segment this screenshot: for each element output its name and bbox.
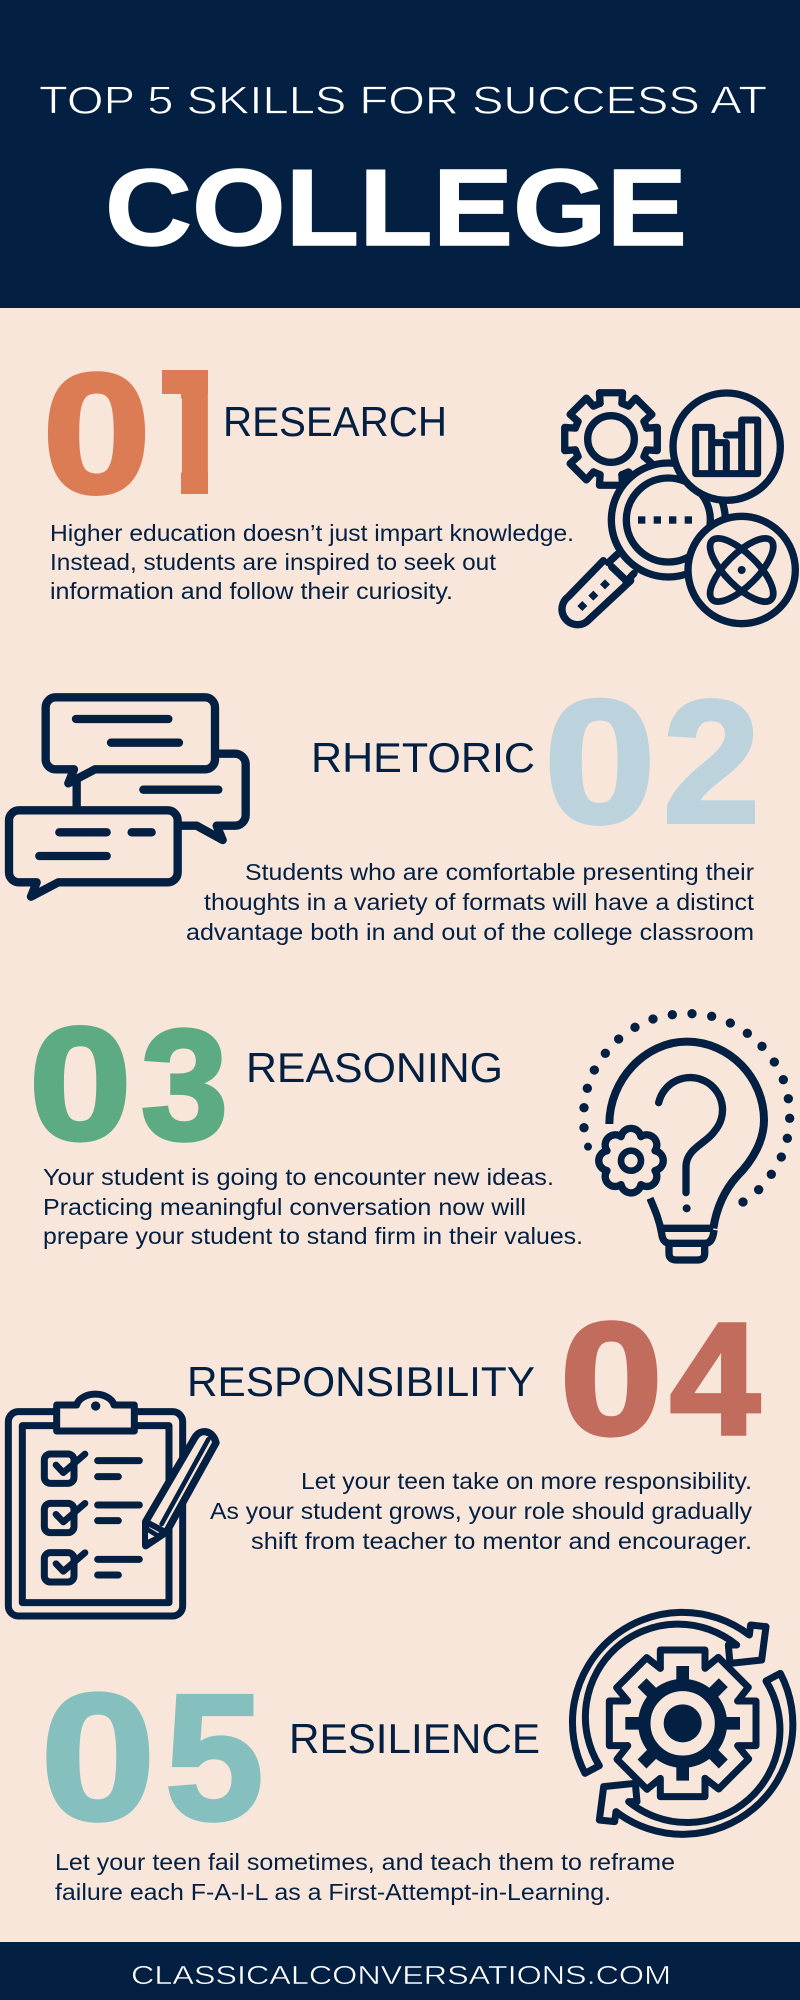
icon: gear with circular arrows [572,1612,793,1834]
number 05: 0 [40,1657,156,1858]
body text responsibility: Let your teen take on more responsibility. [301,1468,752,1494]
title line: TOP 5 SKILLS FOR SUCCESS AT [39,80,767,122]
panel: responsibility [8,1289,760,1616]
number 01: 0 [42,339,151,529]
number 03 [29,994,228,1173]
panel: reasoning [29,994,794,1260]
number 04: 4 [670,1290,760,1468]
number 04: 0 [560,1289,663,1468]
body text responsibility: As your student grows, your role should gradually [210,1498,753,1524]
number 05: 5 [165,1657,264,1857]
body text reasoning: Your student is going to encounter new ideas. [43,1164,554,1190]
body text resilience [55,1849,675,1905]
body text rhetoric [186,859,755,945]
body text rhetoric: Students who are comfortable presenting their [245,859,754,885]
body text resilience: Let your teen fail sometimes, and teach them to reframe [55,1849,675,1875]
header banner [0,0,800,308]
footer website text: CLASSICALCONVERSATIONS.COM [131,1960,671,1990]
heading reasoning: REASONING [246,1044,503,1091]
body text research: Higher education doesn’t just impart knowledge. [50,520,574,546]
body text research: information and follow their curiosity. [50,578,453,604]
number 02 [544,664,760,860]
body text responsibility: shift from teacher to mentor and encourager. [251,1528,752,1554]
panel: resilience [40,1612,793,1905]
number 04 [560,1289,760,1468]
icon: speech bubbles [9,697,246,897]
body text reasoning: prepare your student to stand firm in their values. [43,1223,583,1249]
body text rhetoric: advantage both in and out of the college classroom [186,919,754,945]
number 01: 1 [146,339,236,529]
number 03: 3 [141,998,228,1173]
number 01 [48,370,208,496]
icon: light bulb with question mark and gear [579,1009,794,1260]
body text reasoning [43,1164,583,1249]
heading rhetoric: RHETORIC [311,734,535,781]
heading responsibility: RESPONSIBILITY [187,1358,535,1405]
icon: magnifier with gear, chart and atom [562,393,795,625]
number 03: 0 [29,994,132,1173]
body text research: Instead, students are inspired to seek out [50,549,497,575]
body text reasoning: Practicing meaningful conversation now will [43,1194,526,1220]
body text responsibility [210,1468,753,1554]
body text resilience: failure each F-A-I-L as a First-Attempt-in-Learning. [55,1879,611,1905]
title main word: COLLEGE [105,147,687,269]
number 02: 0 [544,664,656,860]
panel: rhetoric [9,664,760,945]
footer banner [0,1942,800,2000]
body text research [50,520,574,604]
number 02: 2 [663,665,760,860]
body text rhetoric: thoughts in a variety of formats will have a distinct [204,889,755,915]
icon: clipboard checklist with pen [8,1394,216,1616]
heading research: RESEARCH [223,398,447,445]
panel: research [42,339,795,625]
number 05 [40,1657,264,1858]
heading resilience: RESILIENCE [289,1715,540,1762]
